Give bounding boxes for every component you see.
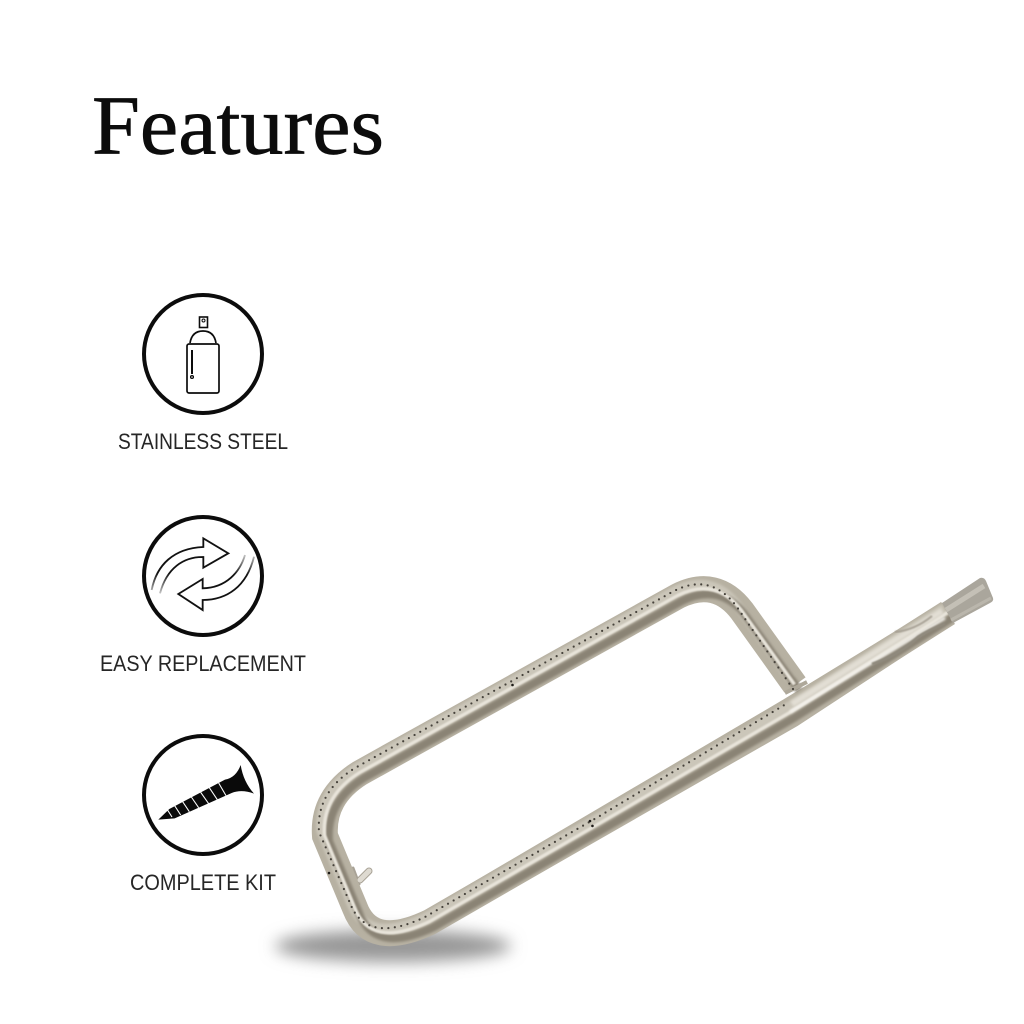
icon: spray can	[144, 295, 262, 413]
burner shadow	[275, 930, 511, 962]
inlet tube highlights	[790, 611, 945, 712]
icon: replacement arrows	[144, 517, 262, 635]
stainless steel burner tube	[319, 578, 993, 938]
feature: complete kit	[130, 736, 276, 895]
label: stainless steel: STAINLESS STEEL	[118, 429, 288, 454]
end fitting	[942, 578, 993, 623]
small valve tab	[353, 868, 369, 884]
feature: stainless steel	[118, 295, 288, 454]
feature: easy replacement	[100, 517, 306, 676]
tube body	[321, 584, 954, 938]
title: Features	[92, 80, 384, 172]
gas port holes	[319, 584, 793, 928]
weld joint	[785, 682, 807, 693]
label: easy replacement: EASY REPLACEMENT	[100, 651, 306, 676]
label: complete kit: COMPLETE KIT	[130, 870, 276, 895]
icon: screw	[144, 736, 262, 854]
